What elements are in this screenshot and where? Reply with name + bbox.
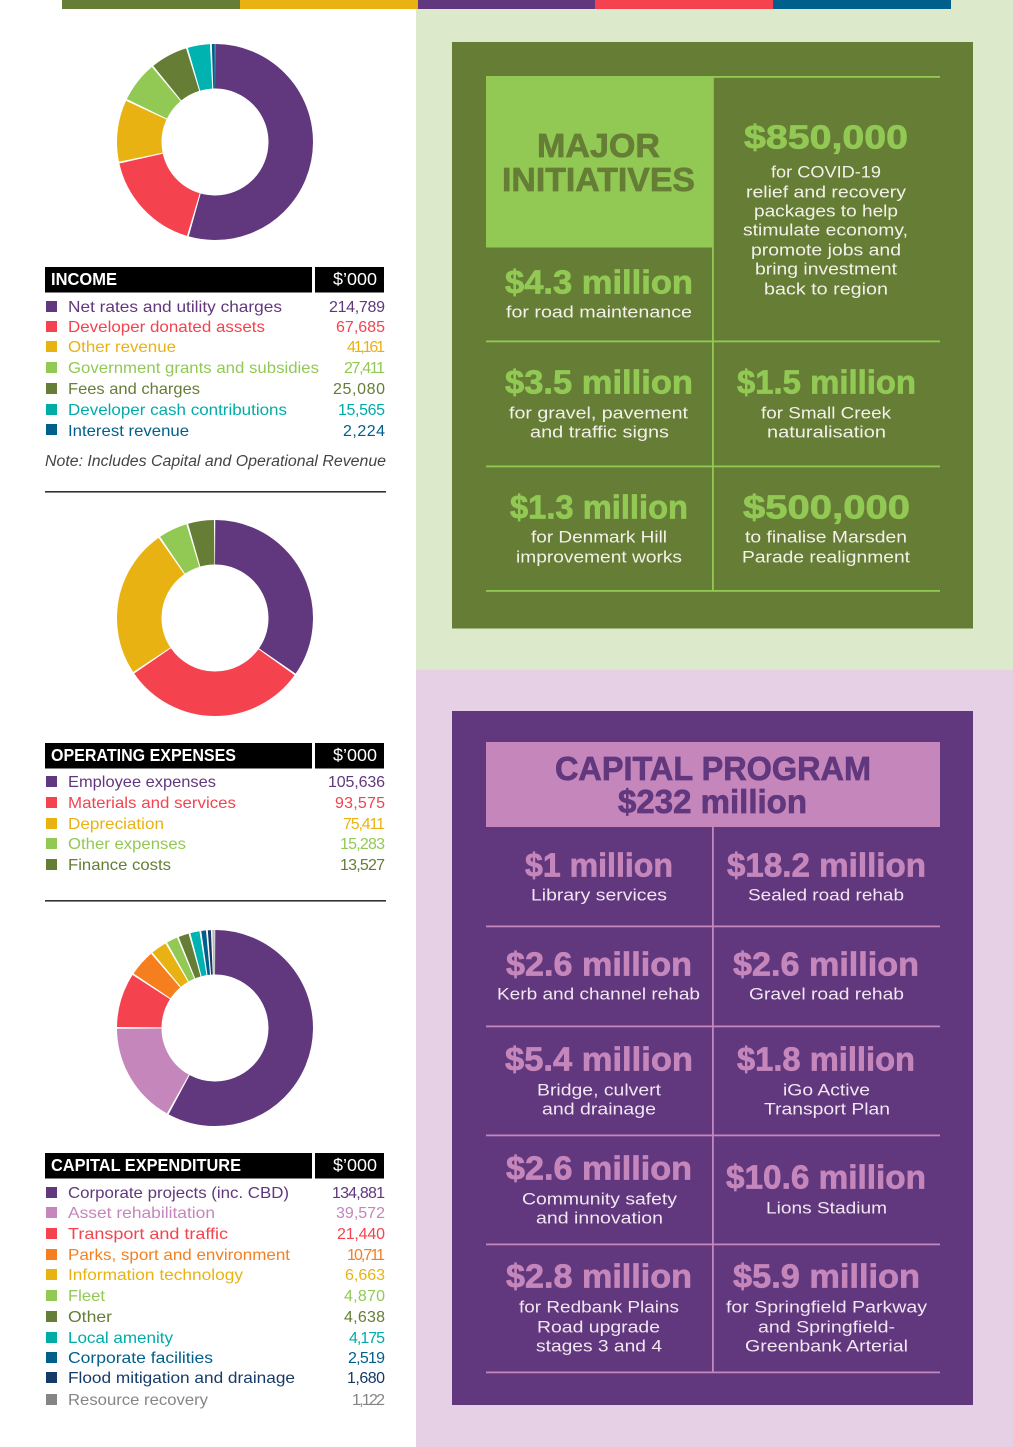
legend row: finance costs: 13,527 (340, 857, 385, 874)
donut chart: capital expenditure (139, 952, 291, 1104)
item: redbank plains road upgrade: stages 3 and 4 (536, 1336, 662, 1356)
legend row: fleet: 4,870 (344, 1288, 385, 1305)
legend row: resource recovery: 1,122 (352, 1392, 385, 1409)
table header: capital expenditure: CAPITAL EXPENDITURE (51, 1155, 241, 1175)
legend row: developer donated assets: 67,685 (336, 319, 385, 336)
initiative: $1.5 million: $1.5 million (737, 363, 916, 400)
item: springfield parkway: and Springfield- (758, 1318, 895, 1336)
initiative: $1.3 million: for Denmark Hill (531, 528, 667, 546)
initiative: $500,000: to finalise Marsden (745, 528, 907, 546)
item: sealed road rehab (727, 846, 926, 904)
legend row: fleet (46, 1288, 385, 1305)
legend row: employee expenses: Employee expenses (68, 774, 216, 791)
table header: operating expenses (45, 743, 384, 768)
legend row: net rates: 214,789 (329, 299, 385, 316)
legend row: asset rehabilitation: Asset rehabilitation (68, 1205, 215, 1222)
item: springfield parkway: $5.9 million (733, 1257, 920, 1294)
table header: operating expenses: OPERATING EXPENSES (51, 745, 236, 765)
legend row: materials and services: Materials and services (68, 795, 236, 812)
initiative: $3.5 million: $3.5 million (505, 363, 693, 400)
item: library services (525, 846, 673, 904)
item: igo active transport plan (737, 1040, 915, 1118)
legend row: depreciation: 75,411 (343, 816, 385, 833)
legend row: government grants: Government grants and subsidies (68, 360, 319, 377)
legend row: asset rehabilitation: 39,572 (336, 1205, 385, 1222)
heading: capital program (486, 742, 940, 827)
item: library services: Library services (531, 886, 667, 904)
legend row: interest revenue: 2,224 (343, 423, 385, 440)
legend row: parks, sport and environment: Parks, sport and environment (68, 1247, 291, 1264)
item: library services: $1 million (525, 846, 673, 883)
legend row: materials and services (46, 795, 385, 812)
item: redbank plains road upgrade: Road upgrade (537, 1318, 660, 1336)
heading: capital program: $232 million (618, 783, 807, 820)
initiative: $850,000 (743, 118, 908, 298)
item: springfield parkway: for Springfield Parkway (726, 1298, 928, 1316)
initiative: $850,000: stimulate economy, (743, 220, 908, 240)
legend row: flood mitigation and drainage: 1,680 (347, 1370, 385, 1387)
item: redbank plains road upgrade: $2.8 million (506, 1257, 692, 1294)
item: igo active transport plan: Transport Plan (764, 1100, 890, 1118)
initiative: $4.3 million (505, 263, 693, 322)
legend row: finance costs (46, 857, 385, 874)
legend row: corporate facilities: 2,519 (348, 1350, 385, 1367)
legend row: corporate facilities (46, 1350, 385, 1367)
legend row: local amenity: Local amenity (68, 1330, 173, 1347)
legend row: resource recovery (46, 1392, 385, 1409)
legend row: other revenue (46, 339, 385, 356)
initiative: $1.5 million: for Small Creek (761, 404, 892, 422)
initiative: $1.5 million (737, 363, 916, 442)
legend row: other: 4,638 (344, 1309, 385, 1326)
item: kerb and channel rehab: $2.6 million (506, 945, 692, 982)
legend row: other revenue: Other revenue (68, 339, 176, 356)
item: sealed road rehab: Sealed road rehab (748, 886, 904, 904)
legend row: parks, sport and environment: 10,711 (347, 1247, 385, 1264)
legend row: local amenity (46, 1330, 385, 1347)
item: gravel road rehab (733, 945, 919, 1004)
legend row: other expenses: Other expenses (68, 836, 186, 853)
item: igo active transport plan: iGo Active (783, 1080, 870, 1100)
legend row: fees and charges: Fees and charges (68, 381, 200, 398)
initiative: $1.3 million (510, 488, 688, 566)
item: bridge, culvert and drainage: $5.4 million (505, 1040, 693, 1077)
legend row: developer donated assets: Developer donated assets (68, 319, 265, 336)
item: lions stadium (726, 1158, 926, 1218)
table: income (45, 267, 385, 440)
item: bridge, culvert and drainage (505, 1040, 693, 1118)
legend row: developer cash contributions (46, 402, 385, 419)
panel: capital program (452, 711, 973, 1405)
legend row: local amenity: 4,175 (349, 1330, 385, 1347)
item: community safety and innovation: and innovation (536, 1208, 663, 1228)
legend row: corporate facilities: Corporate facilities (68, 1350, 213, 1367)
legend row: corporate projects: 134,881 (332, 1185, 385, 1202)
legend row: developer cash contributions: Developer cash contributions (68, 402, 287, 419)
legend row: corporate projects: Corporate projects (inc. CBD) (68, 1185, 289, 1202)
item: lions stadium: Lions Stadium (766, 1198, 887, 1218)
legend row: finance costs: Finance costs (68, 857, 171, 874)
initiative: $1.3 million: $1.3 million (510, 488, 688, 525)
legend row: transport and traffic (46, 1226, 385, 1243)
initiative: $850,000: bring investment (755, 260, 897, 278)
initiative: $1.3 million: improvement works (516, 548, 682, 566)
item: community safety and innovation: Community safety (522, 1190, 678, 1208)
note: Note: Includes Capital and Operational Revenue (45, 453, 386, 470)
item: redbank plains road upgrade: for Redbank Plains (519, 1298, 679, 1316)
legend row: asset rehabilitation (46, 1205, 385, 1222)
legend row: information technology: Information technology (68, 1267, 243, 1284)
item: community safety and innovation: $2.6 million (506, 1149, 692, 1186)
initiative: $850,000: for COVID-19 (771, 162, 881, 182)
initiative: $500,000: Parade realignment (742, 548, 910, 566)
initiative: $850,000: packages to help (754, 202, 898, 220)
item: kerb and channel rehab (497, 945, 700, 1004)
item: kerb and channel rehab: Kerb and channel rehab (497, 984, 700, 1004)
heading: major initiatives: MAJOR (537, 127, 660, 164)
item: redbank plains road upgrade (506, 1257, 692, 1356)
legend row: interest revenue (46, 423, 385, 440)
table header: income: $’000 (333, 269, 377, 289)
initiative: $3.5 million: for gravel, pavement (509, 404, 688, 422)
initiative: $4.3 million: $4.3 million (505, 263, 693, 300)
legend row: flood mitigation and drainage (46, 1370, 385, 1387)
item: sealed road rehab: $18.2 million (727, 846, 926, 883)
legend row: fees and charges: 25,080 (333, 381, 385, 398)
heading: major initiatives: INITIATIVES (502, 161, 695, 198)
table: capital expenditure (45, 1153, 385, 1409)
legend row: developer cash contributions: 15,565 (338, 402, 385, 419)
legend row: fees and charges (46, 381, 385, 398)
legend row: employee expenses: 105,636 (328, 774, 385, 791)
legend row: net rates (46, 299, 385, 316)
table header: income (45, 267, 384, 292)
item: springfield parkway (726, 1257, 928, 1356)
legend row: information technology: 6,663 (345, 1267, 385, 1284)
heading: capital program: CAPITAL PROGRAM (555, 750, 871, 787)
legend row: corporate projects (46, 1185, 385, 1202)
item: bridge, culvert and drainage: and drainage (542, 1100, 656, 1118)
legend row: other revenue: 41,161 (347, 339, 385, 356)
legend row: flood mitigation and drainage: Flood mitigation and drainage (68, 1370, 295, 1387)
legend row: transport and traffic: Transport and traffic (68, 1226, 228, 1243)
legend row: net rates: Net rates and utility charges (68, 299, 282, 316)
legend row: materials and services: 93,575 (335, 795, 385, 812)
item: gravel road rehab: Gravel road rehab (749, 984, 904, 1004)
table header: capital expenditure: $’000 (333, 1155, 377, 1175)
legend row: other (46, 1309, 385, 1326)
initiative: $850,000: promote jobs and (751, 240, 901, 260)
item: bridge, culvert and drainage: Bridge, culvert (537, 1080, 661, 1100)
legend row: fleet: Fleet (68, 1288, 106, 1305)
item: lions stadium: $10.6 million (726, 1158, 926, 1195)
initiative: $500,000 (742, 488, 910, 566)
table header: capital expenditure (45, 1153, 384, 1178)
legend row: depreciation: Depreciation (68, 816, 164, 833)
heading: major initiatives (486, 77, 713, 248)
legend row: other: Other (68, 1309, 113, 1326)
item: igo active transport plan: $1.8 million (737, 1040, 915, 1077)
table header: income: INCOME (51, 269, 117, 289)
panel: major initiatives (452, 42, 973, 628)
legend row: other expenses: 15,283 (340, 836, 385, 853)
top colour bar (62, 0, 951, 9)
item: community safety and innovation (506, 1149, 692, 1228)
item: gravel road rehab: $2.6 million (733, 945, 919, 982)
legend row: interest revenue: Interest revenue (68, 423, 189, 440)
initiative: $500,000: $500,000 (743, 488, 910, 525)
legend row: parks, sport and environment (46, 1247, 385, 1264)
donut chart: operating expenses (139, 542, 291, 694)
table: operating expenses (45, 743, 385, 874)
initiative: $3.5 million (505, 363, 693, 442)
donut chart: income (139, 66, 291, 218)
table header: operating expenses: $’000 (333, 745, 377, 765)
initiative: $850,000: $850,000 (744, 118, 908, 155)
initiative: $850,000: relief and recovery (746, 182, 907, 202)
initiative: $850,000: back to region (764, 280, 888, 298)
legend row: resource recovery: Resource recovery (68, 1392, 208, 1409)
legend row: developer donated assets (46, 319, 385, 336)
legend row: government grants: 27,411 (344, 360, 385, 377)
initiative: $1.5 million: naturalisation (767, 422, 886, 442)
initiative: $4.3 million: for road maintenance (506, 302, 692, 322)
legend row: depreciation (46, 816, 385, 833)
initiative: $3.5 million: and traffic signs (530, 422, 669, 442)
legend row: other expenses (46, 836, 385, 853)
item: springfield parkway: Greenbank Arterial (745, 1336, 908, 1356)
legend row: employee expenses (46, 774, 385, 791)
legend row: transport and traffic: 21,440 (337, 1226, 385, 1243)
legend row: information technology (46, 1267, 385, 1284)
